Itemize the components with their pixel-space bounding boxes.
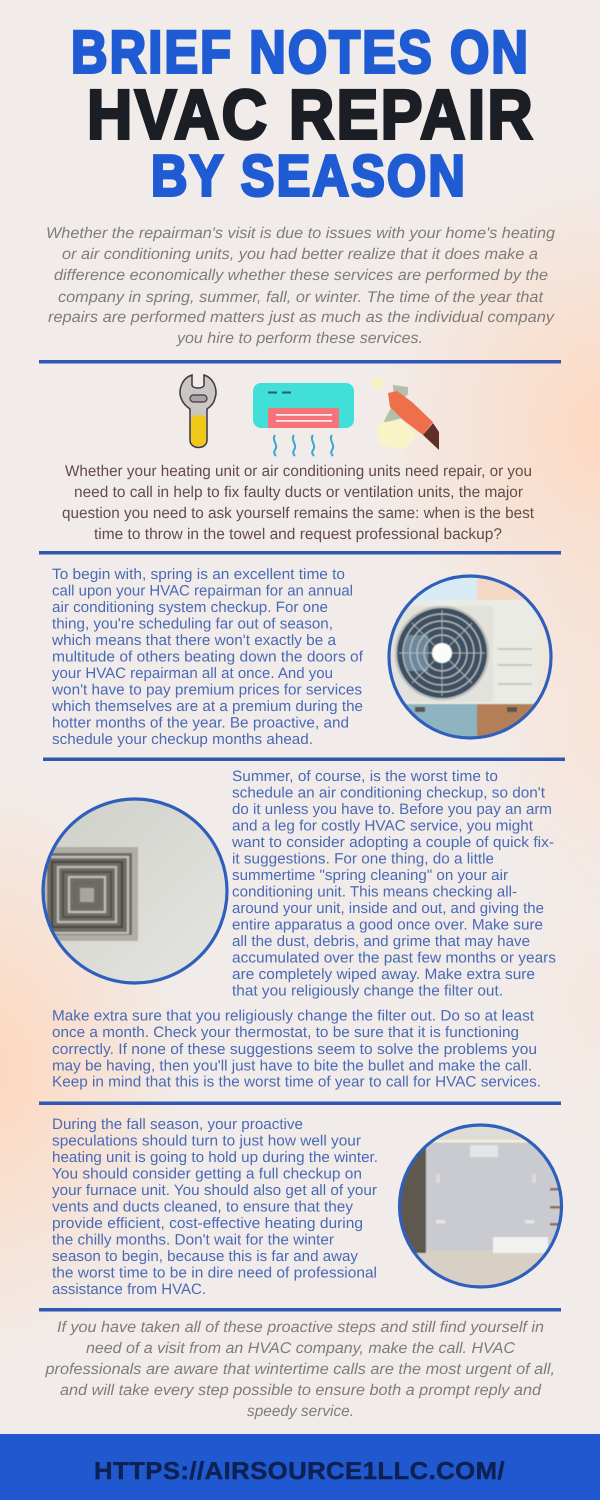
title: HVAC REPAIR (87, 76, 535, 154)
summer text continued: may be having, then you'll just have to bite the bullet and make the call. (52, 1058, 532, 1075)
summer text: do it unless you have to. Before you pay an arm (232, 801, 552, 818)
closing text: speedy service. (247, 1403, 354, 1420)
summer text: want to consider adopting a couple of quick fix- (231, 834, 554, 851)
closing text (44, 1319, 555, 1420)
intro text (46, 225, 555, 347)
summer text continued: correctly. If none of these suggestions seem to solve the problems you (52, 1041, 537, 1058)
spring text: air conditioning system checkup. For one (52, 599, 328, 616)
spring text: hotter months of the year. Be proactive, and (52, 714, 349, 732)
title (71, 18, 535, 208)
intro text: repairs are performed matters just as much as the individual company (48, 309, 555, 326)
middle text (62, 463, 535, 543)
intro text: difference economically whether these services are performed by the (54, 267, 548, 284)
summer text: Summer, of course, is the worst time to (232, 768, 498, 785)
spring text: thing, you're scheduling far out of season, (52, 616, 333, 632)
closing text: professionals are aware that wintertime calls are the most urgent of all, (44, 1361, 555, 1378)
summer text: it suggestions. For one thing, do a little (232, 850, 494, 868)
summer text: all the dust, debris, and grime that may have (232, 933, 530, 950)
footer URL: HTTPS://AIRSOURCE1LLC.COM/ (94, 1458, 505, 1485)
summer text: entire apparatus a good once over. Make sure (232, 916, 543, 934)
intro text: or air conditioning units, you had better realize that it does make a (62, 246, 538, 263)
photo: outdoor AC unit (387, 574, 553, 740)
icon: spray bottle in hand (372, 376, 439, 450)
spring text (51, 566, 364, 748)
summer text: around your unit, inside and out, and giving the (232, 900, 544, 917)
fall text: speculations should turn to just how well your (52, 1132, 361, 1150)
panel: summer (40, 768, 556, 1091)
spring text: schedule your checkup months ahead. (52, 731, 313, 748)
fall text: You should consider getting a full checkup on (52, 1166, 362, 1182)
summer text continued: once a month. Check your thermostat, to be sure that it is functioning (52, 1024, 519, 1041)
intro text: company in spring, summer, fall, or winter. The time of the year that (58, 289, 544, 306)
fall text: your furnace unit. You should also get all of your (52, 1182, 377, 1199)
fall text: season to begin, because this is far and away (52, 1248, 358, 1265)
icon: air conditioner (253, 383, 354, 456)
summer text: are completely wiped away. Make extra sure (232, 966, 535, 983)
fall text: During the fall season, your proactive (52, 1116, 303, 1133)
spring text: call upon your HVAC repairman for an annual (52, 582, 353, 600)
summer text: accumulated over the past few months or years (232, 950, 556, 966)
closing text: and will take every step possible to ensure both a prompt reply and (60, 1382, 542, 1399)
middle text: Whether your heating unit or air conditioning units need repair, or you (65, 463, 532, 480)
fall text (52, 1116, 378, 1298)
middle text: time to throw in the towel and request professional backup? (94, 526, 502, 543)
panel: spring (51, 566, 567, 748)
summer text: that you religiously change the filter out. (232, 982, 503, 1000)
fall text: provide efficient, cost-effective heating during (52, 1215, 363, 1232)
title: BRIEF NOTES ON (71, 18, 530, 86)
footer banner (0, 1434, 600, 1500)
photo: ceiling vent (40, 795, 230, 987)
icon: wrench (180, 375, 216, 448)
summer text (231, 768, 556, 1000)
spring text: your HVAC repairman all at once. And you (52, 665, 333, 682)
intro text: Whether the repairman's visit is due to issues with your home's heating (46, 225, 555, 242)
summer text: conditioning unit. This means checking all- (232, 884, 517, 900)
spring text: won't have to pay premium prices for services (51, 682, 362, 698)
summer text: schedule an air conditioning checkup, so don't (232, 784, 546, 802)
summer text: and a leg for costly HVAC service, you might (232, 818, 534, 834)
summer text continued: Make extra sure that you religiously change the filter out. Do so at least (52, 1008, 535, 1025)
panel: fall (52, 1116, 567, 1298)
fall text: heating unit is going to hold up during the winter. (52, 1149, 378, 1166)
fall text: the worst time to be in dire need of professional (52, 1264, 377, 1282)
spring text: which means that there won't exactly be a (51, 632, 337, 649)
middle text: question you need to ask yourself remains the same: when is the best (62, 505, 535, 522)
intro text: you hire to perform these services. (176, 330, 423, 347)
closing text: If you have taken all of these proactive steps and still find yourself in (57, 1319, 544, 1336)
spring text: To begin with, spring is an excellent time to (52, 566, 345, 583)
spring text: which themselves are at a premium during the (51, 698, 363, 715)
summer text continued (52, 1008, 541, 1091)
spring text: multitude of others beating down the doors of (52, 648, 364, 666)
summer text continued: Keep in mind that this is the worst time of year to call for HVAC services. (52, 1074, 541, 1091)
fall text: the chilly months. Don't wait for the winter (52, 1232, 334, 1248)
photo: room with wall AC (395, 1120, 567, 1292)
middle text: need to call in help to fix faulty ducts or ventilation units, the major (74, 484, 523, 501)
summer text: summertime "spring cleaning" on your air (232, 867, 508, 884)
title: BY SEASON (151, 144, 467, 208)
closing text: need of a visit from an HVAC company, make the call. HVAC (86, 1340, 516, 1357)
fall text: assistance from HVAC. (52, 1281, 206, 1298)
fall text: vents and ducts cleaned, to ensure that they (52, 1198, 353, 1216)
